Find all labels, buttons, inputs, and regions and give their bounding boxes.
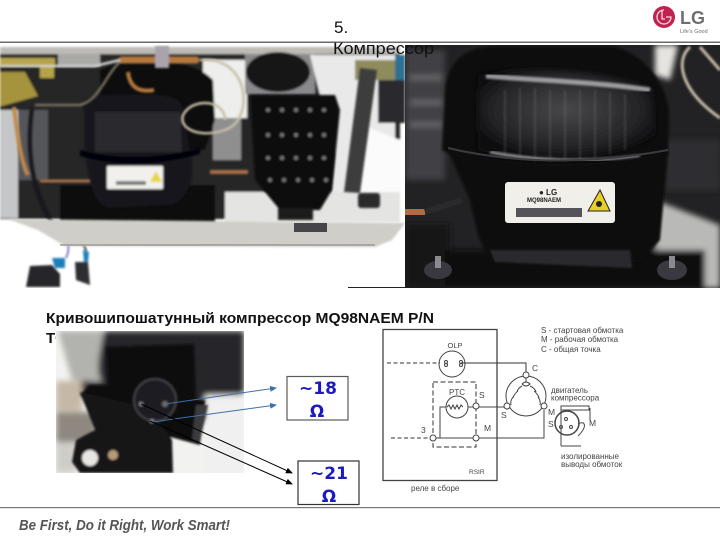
callout: 21 ohm: ~21 — [310, 464, 348, 484]
base tray — [8, 219, 405, 247]
arrows: winding S–M resistance — [152, 388, 276, 422]
compressor label: ● LG — [539, 188, 557, 197]
diagram labels: 3 — [421, 425, 426, 435]
PTC dashed block: PTC — [449, 388, 465, 397]
diagram labels: выводы обмоток — [561, 460, 623, 469]
compressor dome — [442, 46, 669, 165]
relay assembly box — [383, 330, 497, 480]
diagram labels: двигатель — [551, 386, 588, 395]
photo: compressor terminals — [56, 331, 244, 473]
compressor label: MQ98NAEM — [527, 198, 561, 204]
photo: refrigerator machine compartment — [0, 45, 405, 288]
process tubes — [405, 209, 425, 215]
callout: 21 ohm: Ω — [322, 487, 336, 507]
diagram labels: S — [479, 390, 485, 400]
page title: 5. — [334, 18, 348, 37]
LG logo: Life's Good — [680, 29, 708, 35]
diagram labels: S — [548, 419, 554, 429]
diagram labels: изолированные — [561, 452, 620, 461]
footer rule — [0, 507, 720, 508]
PTC dashed block — [433, 382, 476, 447]
relay connectors — [26, 250, 90, 287]
isolated terminal plug — [555, 406, 590, 446]
OLP: OLP — [447, 341, 463, 350]
diagram labels: M — [589, 418, 596, 428]
callout: 18 ohm: Ω — [310, 402, 324, 422]
diagram labels: C — [532, 363, 538, 373]
LG logo: LG — [680, 8, 705, 28]
subtitle second line: TCA — [46, 330, 77, 347]
diagram labels: C - общая точка — [541, 345, 601, 354]
footer slogan: Be First, Do it Right, Work Smart! — [19, 518, 230, 534]
wiring diagram — [383, 330, 590, 480]
wires — [387, 362, 440, 364]
diagram labels: S — [501, 410, 507, 420]
callout: 18 ohm — [287, 376, 348, 422]
OLP — [439, 341, 465, 377]
mount bolts — [424, 261, 452, 279]
diagram labels: RSIR — [469, 469, 485, 476]
diagram labels: M — [484, 423, 491, 433]
terminals — [473, 403, 479, 409]
lower body — [449, 152, 668, 252]
diagram labels: реле в сборе — [411, 484, 460, 493]
arrows: winding C–M resistance — [141, 404, 292, 484]
header rule — [0, 42, 720, 43]
copper pipes — [0, 46, 248, 258]
callout: 21 ohm — [298, 461, 359, 507]
compressor label — [505, 182, 615, 223]
condenser — [250, 68, 380, 220]
page title — [333, 18, 434, 58]
LG logo — [653, 6, 708, 35]
page title: Компрессор — [333, 39, 434, 58]
compressor in compartment — [80, 94, 200, 208]
callout: 18 ohm: ~18 — [299, 379, 337, 399]
diagram labels — [411, 326, 624, 493]
diagram labels: M — [548, 407, 555, 417]
dome surface streaks — [505, 88, 625, 162]
diagram labels: M - рабочая обмотка — [541, 335, 619, 344]
diagram labels: S - стартовая обмотка — [541, 326, 624, 335]
diagram labels: компрессора — [551, 394, 600, 402]
motor — [504, 372, 547, 416]
subtitle: Кривошипошатунный компрессор MQ98NAEM P/N — [46, 310, 434, 327]
photo: compressor close-up — [405, 45, 720, 288]
